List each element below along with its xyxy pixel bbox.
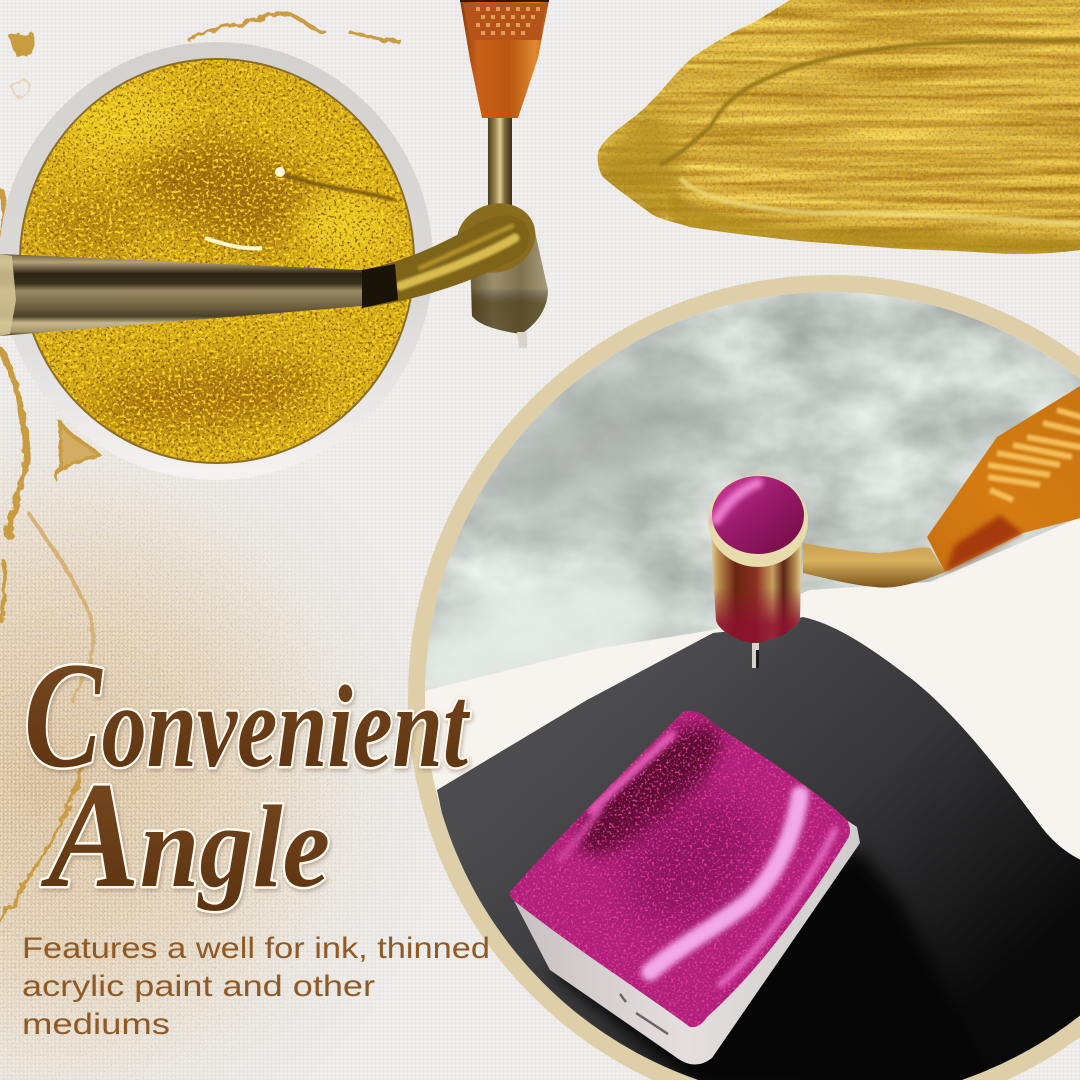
- handle dark red patch: [945, 515, 1023, 572]
- background: canvas texture with beige wash: [0, 394, 428, 1080]
- pink ink in well: [712, 476, 804, 554]
- tool above gold pan: [447, 0, 549, 348]
- handle: [0, 254, 362, 336]
- wall light corner: [426, 567, 674, 690]
- paint brush: [0, 215, 529, 336]
- well rim: [708, 475, 808, 567]
- grey textured wall: [425, 292, 1080, 690]
- title: Convenient Angle: [24, 631, 470, 919]
- gold paint surface: [21, 60, 413, 462]
- wall dark shading: [489, 346, 720, 538]
- gold paint pan: [0, 42, 433, 480]
- bristle base: [362, 264, 398, 308]
- gold stroke swatch: [590, 0, 1080, 260]
- handle end cap: [0, 254, 16, 336]
- knurl dots: [476, 7, 540, 35]
- metal stem: [488, 115, 512, 210]
- dark top edge: [460, 0, 549, 2]
- decorative gold ink veins: [0, 13, 400, 920]
- pan inner shadow: [19, 58, 415, 464]
- description line 1: Features a well for ink, thinned: [22, 932, 490, 965]
- pan marks: [620, 994, 668, 1034]
- cylinder red reflection: [714, 590, 800, 643]
- tan ring around photo: [416, 284, 1080, 1080]
- pink ink highlight: [716, 483, 758, 520]
- well rim with gold paint: [447, 192, 545, 284]
- white table: [420, 515, 1080, 1080]
- needle: [517, 332, 527, 348]
- needle shadow side: [756, 650, 759, 668]
- description line 3: mediums: [22, 1008, 170, 1041]
- knurled grip lines: [988, 410, 1080, 500]
- gold bent arm: [803, 543, 945, 588]
- description line 2: acrylic paint and other: [22, 970, 375, 1003]
- description text: [22, 932, 490, 1041]
- well cylinder: [711, 537, 802, 643]
- orange tool handle: [927, 383, 1080, 572]
- bristles: [362, 215, 529, 308]
- well cylinder: [470, 232, 548, 334]
- orange grip: [460, 0, 549, 118]
- pink paint: [510, 710, 850, 1028]
- title line 2: Angle: [41, 751, 330, 919]
- bristle highlights: [400, 226, 515, 286]
- circular photo of tool and pink paint: [399, 285, 1080, 1080]
- white pan rim: [0, 42, 433, 480]
- knurled band: [463, 3, 546, 40]
- title line 1: Convenient: [24, 631, 470, 799]
- white paint pan body: [510, 712, 860, 1065]
- pan shadow: [550, 850, 1000, 1080]
- dark mat: [437, 617, 1080, 1080]
- needle tip: [752, 643, 759, 668]
- well lower shading: [470, 232, 548, 334]
